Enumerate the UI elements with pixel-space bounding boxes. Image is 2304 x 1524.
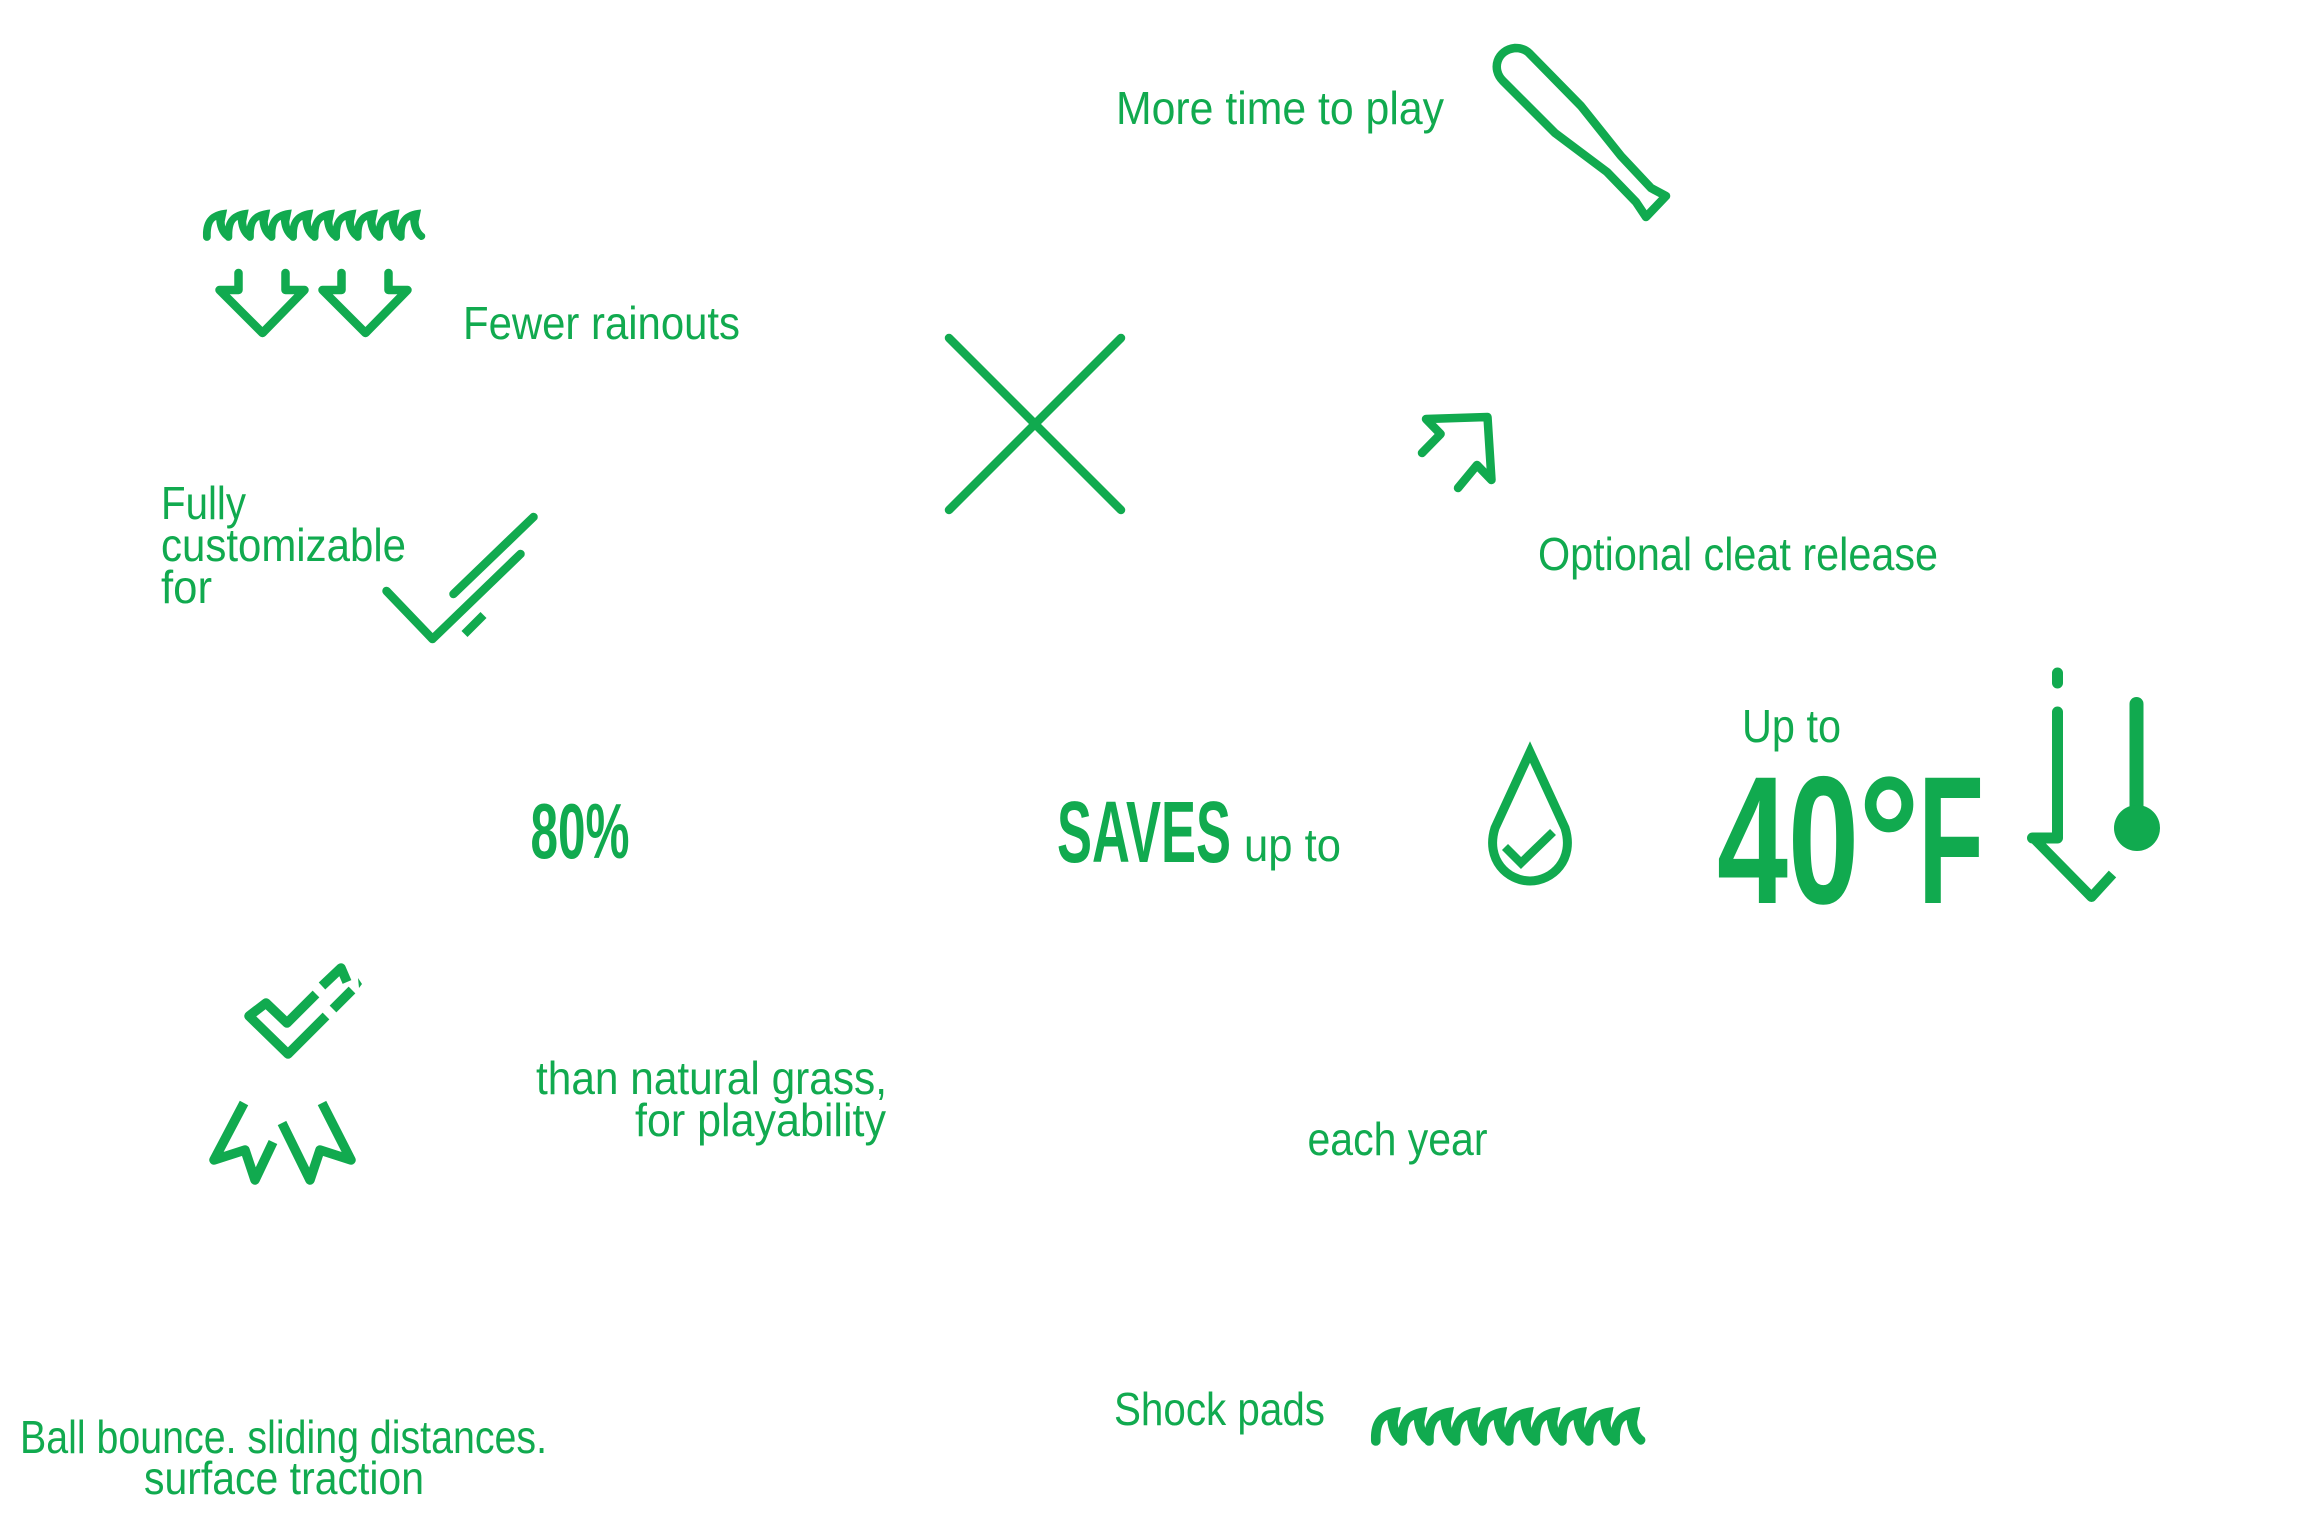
- icon: check mark with speed lines: [386, 517, 534, 639]
- text: shock pads: Shock pads: [1114, 1383, 1325, 1435]
- text: than natural grass, for playability: [536, 1052, 887, 1146]
- icon: thermometer with down arrow: [2032, 673, 2160, 897]
- icon: check mark with award ribbons: [214, 968, 362, 1180]
- icon: baseball bat: [1497, 48, 1666, 217]
- icon: water drop with check: [1493, 752, 1567, 881]
- text: fully customizable for: Fully: [161, 477, 246, 529]
- stat: up to 40°F: [1717, 700, 1984, 942]
- text: than natural grass, for playability: than natural grass,: [536, 1052, 887, 1104]
- stat: up to 40°F: °: [1858, 738, 1920, 942]
- stat: 80%: 80%: [530, 787, 630, 875]
- text: optional cleat release: Optional cleat release: [1538, 528, 1938, 580]
- text: ball bounce, sliding distances, surface traction: Ball bounce. sliding distances.: [20, 1411, 547, 1463]
- stat: saves up to: up to: [1244, 819, 1341, 871]
- text: more time to play: More time to play: [1116, 82, 1444, 134]
- text: ball bounce, sliding distances, surface traction: surface traction: [144, 1452, 424, 1504]
- text: fully customizable for: for: [161, 561, 212, 613]
- icon: large cross: [949, 338, 1121, 510]
- stat: up to 40°F: 40: [1717, 738, 1859, 942]
- text: fully customizable for: [161, 477, 406, 613]
- stat: up to 40°F: F: [1918, 738, 1984, 942]
- stat: up to 40°F: Up to: [1742, 700, 1841, 752]
- text: fewer rainouts: Fewer rainouts: [463, 297, 740, 349]
- text: fully customizable for: customizable: [161, 519, 406, 571]
- text: each year: each year: [1308, 1113, 1488, 1165]
- icon: shock pad grass: [1371, 1407, 1645, 1446]
- icon: grass with drainage arrows: [203, 209, 425, 333]
- icon: cleat release arrow: [1422, 417, 1492, 488]
- text: than natural grass, for playability: for playability: [635, 1094, 886, 1146]
- text: ball bounce, sliding distances, surface traction: [20, 1411, 547, 1504]
- stat: saves up to: SAVES: [1057, 784, 1231, 881]
